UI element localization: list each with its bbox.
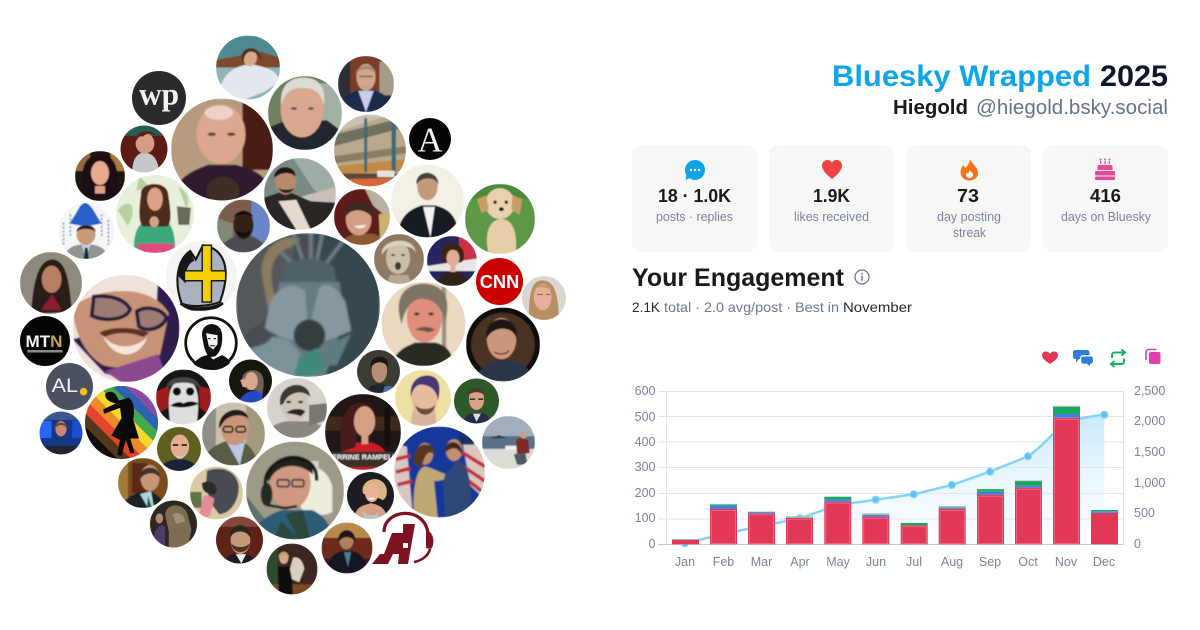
left axis labels [635,384,656,551]
month labels: Jun [866,555,886,569]
avatar: Lincoln illustration [184,316,238,370]
avatar: AL.com logo [46,363,93,410]
avatar: Washington Post logo [132,71,186,125]
right axis labels: 500 [1134,506,1155,520]
avatar: CNN logo: CNN [480,271,519,292]
avatar: man with green hedge [454,378,499,424]
avatar: man in black blazer [391,164,464,238]
icon: quotes legend [1146,350,1160,364]
title year: 2025 [1100,60,1168,93]
icon: reposts legend [1111,350,1125,367]
bars: September [977,489,1004,544]
bars: December [1091,510,1118,544]
bars: November [1053,406,1080,544]
avatar: man with teal tie [118,458,168,508]
bars: May [824,497,851,544]
bars: February [710,504,737,544]
avatar: AL.com logo: AL [52,375,78,397]
month labels: Nov [1055,555,1078,569]
avatar: man with beard outdoors [217,200,270,252]
stat label: likes received [794,210,869,224]
month labels: Mar [751,555,772,569]
avatar: MTN network logo: MTN [26,332,62,351]
avatar: rainbow flag with dancing silhouette [85,386,158,459]
left axis labels: 300 [635,460,656,474]
avatar: bearded smiling man [216,516,263,564]
month labels: Feb [713,555,734,569]
month labels: Oct [1018,555,1038,569]
month labels: Sep [979,555,1001,569]
cumulative points [681,411,1108,547]
right axis labels: 1,000 [1134,476,1165,490]
avatar: man reclining in dark jacket [264,158,336,230]
chart legend [1042,350,1160,367]
chart: monthly engagement stacked bars with cumulative line [635,384,1165,569]
avatar: bronze sculpture with woman [150,500,197,548]
avatar: vintage man with mustache [267,378,327,438]
right axis labels: 2,500 [1134,384,1165,398]
panel: stat likes received [769,145,894,252]
month labels: Jan [675,555,695,569]
icon: heart [822,160,842,179]
avatar: man with purple hair [395,370,451,426]
icon: chat bubble [685,160,705,180]
avatar: red headset A logo [372,513,433,564]
avatar: black and white mustache face [156,370,211,424]
bars: April [786,516,813,544]
avatar: MTN network logo [20,316,70,366]
avatar: woman resting head on hand [229,360,272,402]
avatar: man working by the sea [482,416,535,469]
month labels [675,555,1115,569]
engagement summary: total · 2.0 avg/post · Best in [664,299,839,315]
stat value: 416 [1090,186,1121,206]
right axis labels: 2,000 [1134,414,1165,428]
avatar: woman with flag [427,236,477,286]
avatar: bald man with glasses [157,427,201,471]
avatar: woman holding small dog [266,544,318,594]
bars: July [901,523,928,544]
stat label: days on Bluesky [1061,210,1152,224]
avatar: Catherine Rampell news still [325,394,401,470]
avatar: New York Times building [334,114,406,186]
avatar: smiling man [334,189,390,245]
left axis labels: 500 [635,410,656,424]
avatar: CNN logo [476,258,523,305]
month labels: Aug [941,555,963,569]
handle: @hiegold.bsky.social [976,97,1168,119]
icon: flame [960,159,978,180]
avatar: bishop mitre logo [166,241,237,312]
panel: stat posts and replies [632,145,757,252]
avatar: older man selfie [268,76,342,150]
panel: avatar cluster [20,35,566,594]
avatar: The Atlantic logo: A [418,122,443,160]
avatar: Catherine Rampell news still: ERRINE RAMPELL [332,452,397,461]
stat value: 1.9K [813,186,850,206]
bars: June [862,513,889,544]
panel: stat day posting streak [906,145,1031,252]
avatar: news anchor [40,412,82,454]
avatar: man in navy suit [338,56,394,112]
avatar: dog with tongue out [190,466,243,520]
avatar: golden retriever puppy [465,184,535,254]
right axis labels [1134,384,1165,551]
gridlines [658,391,1124,544]
avatar: shouting statue face [374,234,424,284]
month labels: Apr [790,555,810,569]
avatar: woman with long dark hair [20,252,82,314]
avatar: Statue of Liberty hands over face mural [236,233,380,377]
avatar: man with party hat [58,203,114,259]
avatar: woman in floral top [116,175,194,253]
bars: October [1015,480,1042,544]
month labels: Dec [1093,555,1115,569]
avatar: smiling man with glasses close-up [72,275,180,382]
avatar: Washington Post logo: wp [139,76,179,111]
avatar: woman with dark hair [75,151,125,201]
left axis labels: 400 [635,435,656,449]
left axis labels: 100 [635,511,656,525]
stat label: streak [953,226,987,240]
month labels: May [826,555,851,569]
bars: March [748,512,775,544]
display name: Hiegold [893,97,968,119]
avatar: older man with grey curly hair and mustache [382,282,466,366]
icon: info [855,270,869,284]
month labels: Jul [906,555,922,569]
bars: January [672,539,699,544]
right axis labels: 1,500 [1134,445,1165,459]
stat value: 18 · 1.0K [658,186,731,206]
avatar: man in dark jacket in front of booths [322,522,372,574]
avatar: bald man with microphone [171,98,273,204]
icon: likes legend [1042,352,1058,364]
avatar: handshake in front of US flags [394,426,485,518]
avatar: The Atlantic logo [409,118,451,160]
left axis labels: 600 [635,384,656,398]
avatar: dark-haired young man [357,350,400,393]
avatar: toddler [120,126,168,172]
stat label: day posting [937,210,1001,224]
icon: cake [1095,158,1115,180]
cumulative area [685,415,1104,544]
avatar: man with black ring border [466,308,540,382]
engagement summary: 2.1K [632,299,661,315]
stat value: 73 [957,186,979,206]
right axis labels: 0 [1134,537,1141,551]
left axis labels: 200 [635,486,656,500]
avatar: pilot with headset in cockpit [246,442,344,540]
left axis labels: 0 [649,537,656,551]
avatar: blonde woman on dark background [347,472,394,519]
bars: August [939,506,966,544]
section heading: Your Engagement: Your Engagement [632,264,845,292]
engagement summary: November [843,299,912,315]
icon: replies legend [1073,350,1093,366]
title: Bluesky Wrapped [832,60,1091,93]
avatar: blonde woman with glasses [522,276,566,320]
panel: stat days on Bluesky [1043,145,1168,252]
avatar: woman on teal sofa [216,35,280,99]
cumulative line [685,415,1104,543]
avatar: man with glasses and grey jacket [202,402,265,466]
stat label: posts · replies [656,210,733,224]
